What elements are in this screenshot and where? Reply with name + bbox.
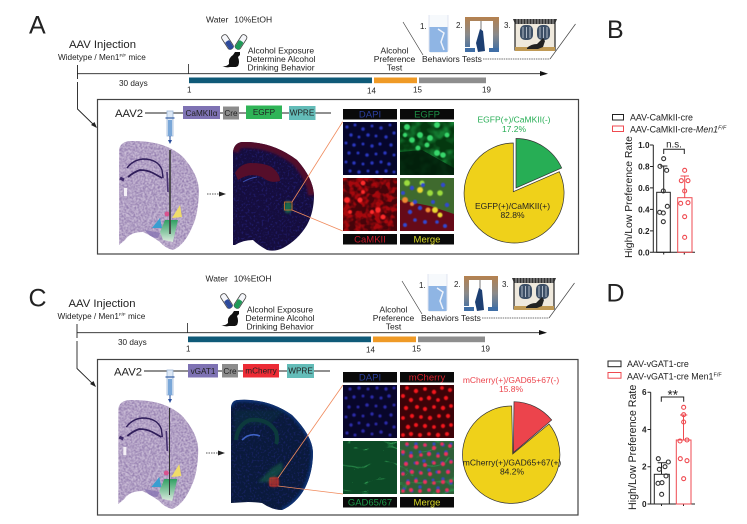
micrograph: mCherry C	[400, 385, 454, 438]
heading: AAV injection A: AAV Injection	[69, 39, 136, 51]
pie chart C: mCherry(+)/GAD65+67(+)	[463, 458, 561, 468]
image: fluorescent brain A	[230, 140, 316, 252]
text: mouse strain A: Widetype / Men1	[58, 53, 119, 62]
pie chart A: EGFP(+)/CaMKII(-)	[478, 115, 551, 125]
micrograph labels C: DAPI	[359, 373, 381, 384]
legend D: AAV-vGAT1-cre	[627, 359, 689, 369]
pie chart A: EGFP(+)/CaMKII(+)	[475, 201, 550, 211]
bar chart B: 0.4	[638, 205, 650, 214]
heading: AAV injection C: AAV Injection	[68, 298, 135, 310]
text: test numbers C: 2.	[454, 280, 461, 289]
icon: bottles C	[220, 293, 247, 309]
zoom box and lines A	[284, 122, 343, 231]
text: alcohol preference test C: Preference	[373, 313, 415, 323]
construct C: Cre	[223, 367, 237, 376]
text: alcohol exposure A: Alcohol Exposure	[248, 46, 314, 56]
micrograph: DAPI C	[343, 385, 397, 438]
legend D	[608, 359, 722, 381]
behaviors test callout A	[403, 22, 576, 59]
text: alcohol exposure A: Determine Alcohol	[247, 54, 316, 64]
icons: behavior apparatus C	[428, 274, 556, 311]
micrograph: merge A	[400, 178, 454, 231]
bar chart D: 0	[642, 500, 647, 509]
legend D: F/F	[713, 372, 722, 378]
micrograph labels C: Merge	[414, 498, 440, 509]
panel: AAV2 experiment A	[98, 100, 578, 254]
timeline A: 14	[367, 86, 376, 96]
text: water and ethanol A: 10%EtOH	[234, 14, 272, 24]
icons: behavior apparatus A	[429, 15, 557, 52]
timeline A: 1	[187, 86, 192, 94]
pie chart C: 15.8%	[499, 384, 523, 394]
micrograph labels C	[343, 372, 454, 509]
construct C: vGAT1	[191, 367, 216, 376]
icon: syringe and needle A	[166, 111, 174, 234]
text: alcohol exposure C: Determine Alcohol	[246, 313, 315, 323]
micrograph: DAPI A	[343, 122, 397, 175]
timeline A: 15	[413, 86, 422, 94]
text: water and ethanol C	[206, 274, 271, 284]
bar chart D: 4	[642, 425, 647, 434]
text: alcohol preference test A: Preference	[374, 54, 416, 64]
micrograph: merge C	[400, 441, 454, 494]
text: mouse strain C: F/F	[119, 312, 126, 317]
pie chart A: 82.8%	[500, 210, 525, 220]
construct A: CaMKIIα	[185, 109, 218, 118]
image: Nissl brain section C	[118, 400, 198, 509]
icon: mouse A	[222, 52, 240, 67]
micrograph: CaMKII A	[343, 178, 397, 231]
construct C: mCherry	[245, 366, 278, 376]
micrograph labels A: Merge	[414, 235, 440, 246]
text: water and ethanol C: 10%EtOH	[234, 274, 271, 284]
timeline C	[77, 323, 547, 387]
timeline C: 15	[412, 344, 421, 354]
pie chart C: mCherry(+)/GAD65+67(-)	[463, 375, 559, 385]
construct A: AAV2	[115, 108, 143, 120]
text: test numbers C: 1.	[419, 281, 426, 290]
legend B	[612, 112, 727, 135]
panel letter B: B	[607, 16, 624, 44]
text: test numbers A: 1.	[420, 22, 427, 31]
text: water and ethanol A: Water	[206, 14, 229, 24]
legend B: AAV-CaMkII-cre	[630, 112, 693, 122]
timeline C: 30 days	[118, 338, 147, 347]
timeline A	[77, 64, 548, 128]
zoom box and lines C	[270, 385, 343, 494]
text: behaviors tests A: Behaviors Tests	[422, 54, 482, 64]
pie chart A	[464, 115, 564, 243]
timeline A: 19	[482, 86, 491, 94]
text: mouse strain C: mice	[126, 312, 146, 321]
text: test numbers C	[419, 280, 509, 290]
micrograph: EGFP A	[400, 122, 454, 175]
bar chart B: 0.2	[638, 227, 650, 236]
text: alcohol exposure C: Alcohol Exposure	[247, 305, 313, 315]
text: water and ethanol A	[206, 14, 272, 24]
construct C: WPRE	[288, 366, 313, 376]
bar chart D: 6	[642, 388, 647, 397]
pie chart C: 84.2%	[500, 466, 524, 476]
micrograph labels A: DAPI	[359, 110, 381, 121]
icon: mouse C	[221, 311, 239, 326]
micrograph: GAD65/67 C	[343, 441, 397, 494]
pie chart C	[462, 375, 561, 503]
pie chart A: 17.2%	[502, 124, 526, 134]
image: Nissl brain section A	[119, 141, 199, 250]
timeline C: 19	[481, 344, 490, 354]
legend B: AAV-CaMkII-cre-Men1	[630, 125, 718, 135]
construct A: Cre	[224, 109, 238, 118]
micrograph labels C: GAD65/67	[348, 498, 392, 509]
text: mouse strain A: mice	[126, 53, 146, 62]
bar chart D	[627, 385, 695, 510]
text: test numbers C: 3.	[502, 280, 509, 289]
text: alcohol preference test C: Test	[386, 322, 402, 332]
bar chart B: 1.0	[638, 141, 650, 150]
bar chart B: 0.6	[638, 184, 650, 193]
bar chart B: 0.0	[638, 248, 650, 257]
bar chart B: High/Low Preference Rate	[624, 136, 635, 258]
micrograph labels A: CaMKII	[354, 235, 386, 246]
image: fluorescent brain C	[231, 400, 313, 510]
panel letter D: D	[606, 280, 625, 308]
timeline A: 30 days	[119, 79, 148, 88]
legend D: AAV-vGAT1-cre Men1	[627, 371, 713, 381]
text: mouse strain C: Widetype / Men1	[58, 312, 119, 321]
bar chart D: 2	[642, 463, 647, 472]
timeline C: 14	[366, 346, 375, 354]
legend B: F/F	[718, 126, 727, 132]
text: alcohol preference test A: Test	[387, 63, 403, 73]
text: test numbers A: 2.	[456, 21, 463, 30]
panel letter A: A	[29, 12, 46, 40]
bar chart B: 0.8	[638, 162, 650, 172]
construct A: EGFP	[253, 108, 276, 117]
micrograph labels A: EGFP	[414, 110, 440, 121]
construct C	[114, 364, 330, 378]
icon: bottles A	[221, 34, 248, 50]
text: alcohol preference test C: Alcohol	[380, 305, 408, 315]
text: alcohol preference test A: Alcohol	[381, 46, 409, 56]
micrograph labels C: mCherry	[409, 373, 445, 384]
behaviors test callout C	[402, 281, 574, 318]
timeline C: 1	[186, 344, 191, 354]
text: behaviors tests C: Behaviors Tests	[421, 313, 481, 323]
panel: AAV2 experiment C	[98, 360, 578, 515]
icon: syringe and needle C	[166, 370, 174, 495]
bar chart D: **	[667, 388, 679, 402]
bar chart B	[624, 136, 695, 258]
text: water and ethanol C: Water	[206, 274, 228, 284]
bar chart B: n.s.	[666, 140, 682, 150]
text: test numbers A	[420, 21, 511, 31]
construct C: AAV2	[114, 366, 142, 378]
arrow C	[206, 450, 225, 456]
micrograph labels A	[343, 109, 454, 246]
construct A: WPRE	[290, 108, 315, 118]
text: test numbers A: 3.	[504, 21, 511, 30]
construct A	[115, 106, 331, 120]
text: mouse strain A: F/F	[119, 53, 126, 58]
text: alcohol exposure C: Drinking Behavior	[246, 322, 314, 332]
arrow A	[207, 192, 226, 196]
bar chart D: High/Low Preference Rate	[627, 385, 639, 510]
panel letter C: C	[28, 284, 47, 312]
text: alcohol exposure A: Drinking Behavior	[247, 63, 315, 73]
